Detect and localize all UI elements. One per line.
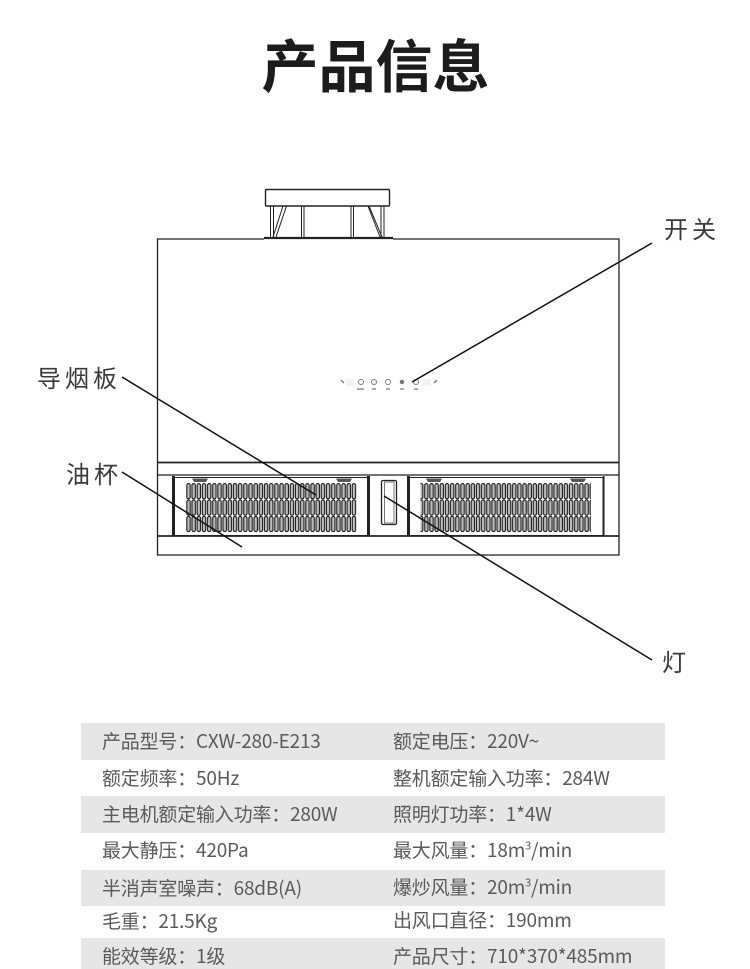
- row 5: 半消声室噪声：68dB(A): [102, 874, 302, 901]
- leader line: smoke guide plate: [122, 377, 316, 495]
- row 7: 产品尺寸：710*370*485mm: [393, 942, 632, 969]
- light fixture: [382, 480, 396, 524]
- row 3: 主电机额定输入功率：280W: [102, 800, 338, 827]
- row 3: [81, 796, 665, 833]
- leader line: lamp: [384, 496, 652, 660]
- left filter panel: [172, 476, 370, 536]
- row 4: 最大风量：18m3/min: [393, 836, 572, 863]
- label: oil cup: 油杯: [66, 455, 122, 490]
- row 3: 照明灯功率：1*4W: [393, 800, 552, 827]
- label: smoke guide plate: 导烟板: [37, 359, 121, 394]
- diagram: range hood line drawing: [122, 188, 652, 661]
- row 4: [102, 836, 572, 863]
- row 1: [81, 723, 665, 760]
- row 1: 额定电压：220V~: [393, 727, 539, 754]
- hood body outline: [158, 239, 619, 555]
- row 5: [81, 870, 665, 906]
- row 6: 毛重：21.5Kg: [102, 907, 217, 934]
- label: switch: 开关: [664, 210, 720, 245]
- row 7: [81, 938, 665, 969]
- row 2: [102, 764, 610, 791]
- right filter panel: [407, 476, 604, 536]
- leader line: oil cup: [122, 472, 242, 547]
- leader line: switch: [412, 243, 652, 382]
- row 5: 爆炒风量：20m3/min: [393, 873, 572, 900]
- row 2: 额定频率：50Hz: [102, 764, 239, 791]
- row 7: 能效等级：1级: [102, 942, 225, 969]
- row 6: 出风口直径：190mm: [393, 906, 572, 933]
- duct collar on top of hood: [264, 190, 393, 238]
- row 2: 整机额定输入功率：284W: [393, 764, 610, 791]
- label: lamp: 灯: [662, 643, 690, 678]
- control panel icons: [341, 379, 437, 389]
- title: 产品信息: [262, 22, 490, 104]
- specification table: [81, 723, 665, 969]
- row 4: 最大静压：420Pa: [102, 836, 248, 863]
- row 1: 产品型号：CXW-280-E213: [102, 727, 321, 754]
- row 6: [102, 906, 572, 934]
